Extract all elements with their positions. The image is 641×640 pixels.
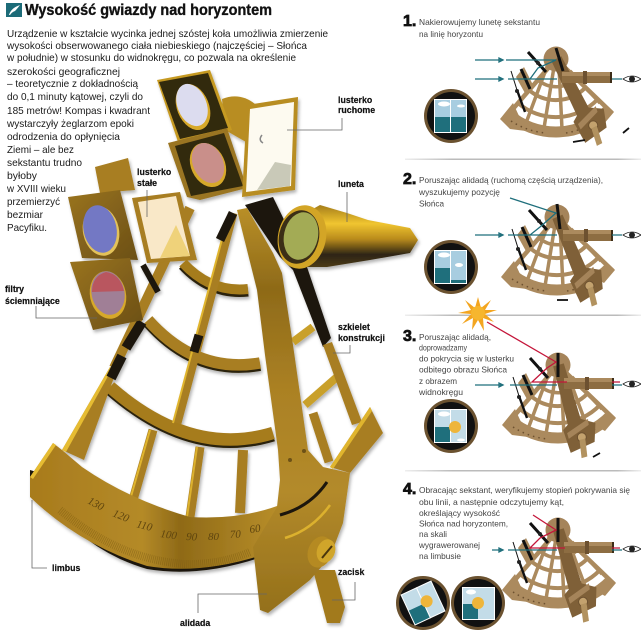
step 4 text: wygrawerowanej bbox=[418, 540, 480, 550]
step 2 view through the scope bbox=[424, 240, 478, 294]
moving mirror bbox=[242, 97, 298, 197]
upper filter bbox=[157, 70, 232, 142]
intro text block bbox=[6, 29, 328, 234]
alidade arm bbox=[237, 208, 350, 613]
step 3 text bbox=[418, 332, 514, 397]
step 1 text: na linię horyzontu bbox=[419, 29, 483, 39]
step 4 panel bbox=[396, 481, 641, 630]
label: lusterko ruchome bbox=[287, 95, 375, 130]
step 2 movement arrow bbox=[557, 299, 568, 301]
step 4 text: na skali bbox=[419, 529, 447, 539]
label: alidada bbox=[180, 594, 267, 628]
limb with degree scale: 90 bbox=[186, 531, 198, 544]
right limb section bbox=[330, 407, 383, 473]
step 2 small sextant bbox=[501, 204, 615, 310]
intro text block: Urządzenie w kształcie wycinka jednej szóstej koła umożliwia zmierzenie bbox=[7, 29, 328, 40]
step 4 number: 4. bbox=[403, 481, 416, 498]
step 4 aligned view bbox=[451, 576, 505, 630]
intro text block: przemierzyć bbox=[7, 197, 60, 208]
rear plate of filters bbox=[95, 158, 135, 193]
title: Wysokość gwiazdy nad horyzontem bbox=[25, 2, 272, 19]
step 3 text: do pokrycia się w lusterku bbox=[419, 354, 514, 364]
step 3 light rays bbox=[475, 383, 622, 387]
right rim lower section bbox=[323, 342, 362, 425]
label: filtry ściemniające: ściemniające bbox=[5, 296, 60, 306]
step 3 view through the scope bbox=[424, 399, 478, 453]
label: szkielet konstrukcji bbox=[333, 322, 385, 353]
step 4 text: Obracając sekstant, weryfikujemy stopień pokrywania się bbox=[419, 485, 630, 495]
label: lusterko stałe: stałe bbox=[137, 178, 157, 188]
telescope bbox=[272, 201, 418, 273]
step 2 text bbox=[418, 175, 603, 208]
step 3 movement arrow bbox=[593, 453, 600, 457]
main sextant illustration bbox=[30, 70, 418, 623]
step 1 light rays bbox=[475, 58, 622, 81]
step 4 text bbox=[418, 485, 630, 561]
step 1 text: Nakierowujemy lunetę sekstantu bbox=[419, 17, 540, 27]
left rim bbox=[62, 208, 190, 460]
step 4 reflected sun ray bbox=[530, 515, 620, 548]
step 2 text: Poruszając alidadą (ruchomą częścią urządzenia), bbox=[419, 175, 603, 185]
limb with degree scale bbox=[30, 443, 280, 572]
step 3 text: Poruszając alidadą, bbox=[419, 332, 491, 342]
intro text block: Ziemi – ale bez bbox=[7, 145, 74, 156]
step 3 number: 3. bbox=[403, 328, 416, 345]
step 1 text bbox=[419, 17, 540, 39]
step 3 text: doprowadzamy bbox=[419, 343, 468, 353]
step 1 view through the scope bbox=[424, 89, 478, 143]
label: alidada: alidada bbox=[180, 618, 210, 628]
step 3 panel bbox=[403, 322, 641, 461]
label: lusterko ruchome: lusterko bbox=[338, 95, 373, 105]
intro text block: 185 metrów! Kompas i kwadrant bbox=[7, 106, 150, 117]
intro text block: – teoretycznie z dokładnością bbox=[7, 79, 138, 90]
step 1 panel bbox=[403, 13, 641, 150]
step 3 eye bbox=[623, 381, 641, 387]
moving mirror backing disc bbox=[222, 96, 260, 150]
fixed mirror bbox=[132, 192, 197, 263]
intro text block: byłoby bbox=[7, 171, 38, 182]
step 2 number: 2. bbox=[403, 171, 416, 188]
intro text block: do 0,1 minuty kątowej, czyli do bbox=[7, 92, 143, 103]
step 4 text: na limbusie bbox=[419, 551, 461, 561]
step 3 text: widnokręgu bbox=[418, 387, 463, 397]
step 3 text: z obrazem bbox=[419, 376, 457, 386]
clamp screw bbox=[303, 533, 339, 571]
label: filtry ściemniające: filtry bbox=[5, 284, 24, 294]
step 4 text: obu linii, a następnie odczytujemy kąt, bbox=[419, 497, 564, 507]
step 1 movement arrows bbox=[573, 128, 629, 142]
step 3 small sextant bbox=[502, 352, 616, 461]
intro text block: w południe) w stosunku do widnokręgu, co pozwala na określenie bbox=[6, 53, 296, 64]
intro text block: szerokości geograficznej bbox=[7, 67, 120, 78]
label: luneta: luneta bbox=[338, 179, 364, 189]
limb with degree scale: 100 bbox=[160, 528, 178, 542]
second filter bbox=[168, 128, 247, 200]
step 3 reflected sun ray bbox=[487, 322, 620, 382]
step 4 text: określający wysokość bbox=[419, 508, 500, 518]
intro text block: wystarczyły żeglarzom epoki bbox=[6, 119, 134, 130]
step 2 text: Słońca bbox=[419, 198, 444, 208]
intro text block: Pacyfiku. bbox=[7, 223, 47, 234]
step 3 text: odbitego obrazu Słońca bbox=[419, 364, 507, 374]
intro text block: sekstantu trudno bbox=[7, 158, 82, 169]
intro text block: wysokości obserwowanego ciała niebieskiego (najczęściej – Słońca bbox=[6, 41, 307, 52]
label: luneta bbox=[338, 179, 364, 222]
icon: title badge bbox=[6, 3, 22, 17]
intro text block: odrodzenia do opłynięcia bbox=[7, 132, 120, 143]
limb with degree scale: 60 bbox=[249, 522, 262, 536]
clamp lever bbox=[313, 570, 345, 623]
step 1 number: 1. bbox=[403, 13, 416, 30]
intro text block: bezmiar bbox=[7, 210, 44, 221]
limb with degree scale: 110 bbox=[135, 518, 154, 534]
left blue filter bbox=[68, 190, 138, 260]
label: limbus bbox=[32, 500, 80, 573]
limb with degree scale: 70 bbox=[230, 528, 242, 541]
label: limbus: limbus bbox=[52, 563, 80, 573]
black rear edge of the frame bbox=[245, 197, 331, 347]
label: lusterko stałe: lusterko bbox=[137, 167, 172, 177]
step 2 text: wyszukujemy pozycję bbox=[418, 187, 500, 197]
step 4 text: Słońca nad horyzontem, bbox=[419, 518, 508, 528]
step 4 eye bbox=[623, 546, 641, 552]
limb with degree scale: 130 bbox=[86, 495, 106, 514]
intro text block: w XVIII wieku bbox=[6, 184, 66, 195]
skeleton frame arcs and spokes bbox=[110, 213, 337, 517]
step 2 light rays bbox=[475, 198, 622, 237]
label: lusterko ruchome: ruchome bbox=[338, 105, 375, 115]
step 4 small sextant bbox=[502, 518, 616, 626]
label: zacisk: zacisk bbox=[338, 567, 365, 577]
limb with degree scale: 80 bbox=[208, 531, 220, 543]
step 2 panel bbox=[403, 171, 641, 310]
step 4 light rays bbox=[492, 548, 622, 552]
step 1 eye bbox=[623, 76, 641, 82]
left lower filter bbox=[70, 258, 143, 330]
label: szkielet konstrukcji: szkielet bbox=[338, 322, 370, 332]
label: zacisk bbox=[332, 567, 365, 600]
step 4 tilted view bbox=[396, 576, 450, 630]
limb with degree scale: 120 bbox=[111, 508, 131, 525]
step 2 eye bbox=[623, 232, 641, 238]
step 1 small sextant bbox=[500, 46, 617, 150]
sun bbox=[458, 297, 497, 331]
label: filtry ściemniające bbox=[5, 284, 97, 318]
label: szkielet konstrukcji: konstrukcji bbox=[338, 333, 385, 343]
label: lusterko stałe bbox=[137, 167, 172, 217]
